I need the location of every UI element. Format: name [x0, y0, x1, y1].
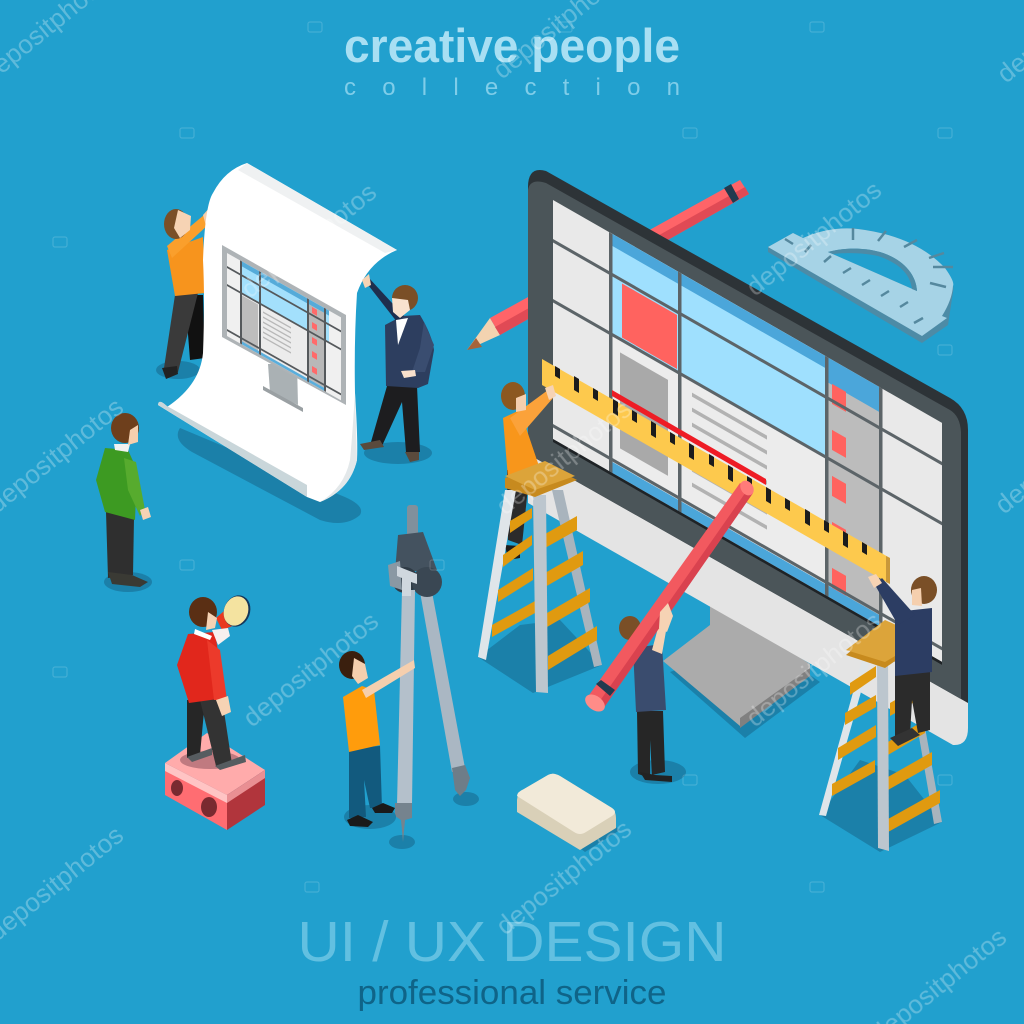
eraser: [517, 774, 620, 852]
person: navy hoodie holding paper: [360, 274, 434, 464]
monitor bezel: [528, 170, 968, 703]
hand on pencil: [659, 603, 673, 632]
ladder left: [478, 461, 602, 693]
image placeholder: [620, 352, 668, 476]
headline: UI / UX DESIGN: [298, 910, 726, 974]
subheading: professional service: [358, 974, 666, 1012]
monitor chin: [528, 440, 968, 745]
watermark camera icons: [53, 22, 952, 892]
title: creative people collection: collection: [344, 74, 680, 101]
watermark: depositphotos: [740, 175, 887, 302]
big pencil: [582, 478, 757, 715]
title: creative people collection: creative people: [344, 19, 680, 72]
watermark: depositphotos: [740, 606, 887, 733]
red guide line: [612, 390, 766, 485]
monitor stand: [663, 600, 820, 738]
person: orange holding paper: [156, 206, 215, 379]
watermark: depositphotos: [237, 606, 384, 733]
red content block: [622, 284, 677, 369]
person: navy holding big pencil: [619, 606, 686, 784]
text lines: [692, 393, 767, 530]
ladder right: [819, 620, 942, 852]
person: green sweater: [96, 413, 152, 592]
person: navy on ladder holding ruler: [868, 574, 937, 746]
sidebar red squares: [832, 384, 846, 596]
megaphone: [212, 592, 255, 645]
person: orange shirt at compass: [339, 651, 415, 829]
screen: [553, 200, 942, 665]
paper shadow: [178, 428, 361, 523]
watermark: depositphotos: [490, 814, 637, 941]
ruler: [542, 359, 890, 584]
title: creative people collection: [344, 19, 680, 101]
person: megaphone on sharpener: [165, 592, 265, 830]
pencil behind monitor: [467, 180, 749, 350]
compass: [388, 505, 479, 849]
paper sheet: [158, 163, 397, 502]
watermark: depositphotos: [490, 394, 637, 521]
mini monitor drawing: [222, 245, 346, 412]
monitor: [528, 170, 968, 745]
pencil sharpener: [165, 733, 265, 830]
watermark: depositphotos: [235, 177, 382, 304]
person: orange on ladder holding ruler: [501, 382, 556, 560]
protractor: [768, 228, 953, 343]
